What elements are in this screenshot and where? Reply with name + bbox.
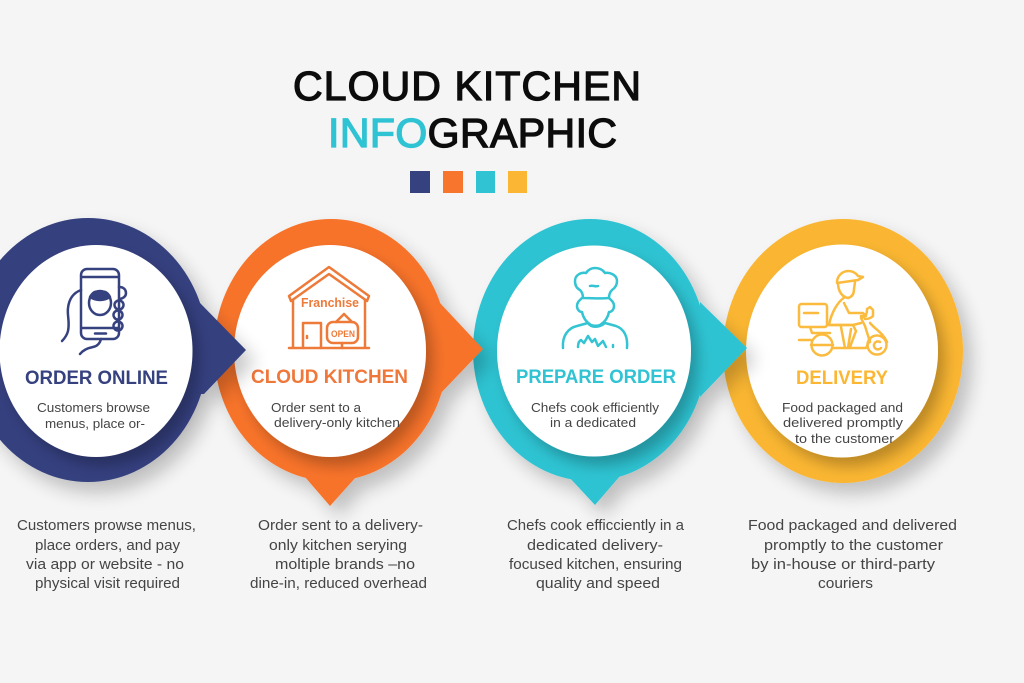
inner text: delivery: to the customer <box>795 431 895 446</box>
inner text: delivery: delivered promptly <box>783 415 904 430</box>
title: INFOGRAPHIC <box>328 110 617 156</box>
description: prepare order <box>507 518 684 592</box>
icon: delivery scooter <box>799 271 887 356</box>
white disc <box>497 246 691 456</box>
description: delivery: promptly to the customer <box>764 538 943 554</box>
description: cloud kitchen: Order sent to a delivery- <box>258 518 423 534</box>
description: prepare order: Chefs cook efficciently in a <box>507 518 684 534</box>
description: cloud kitchen: moltiple brands –no <box>275 557 415 573</box>
description: delivery: couriers <box>818 576 873 592</box>
description: cloud kitchen: dine-in, reduced overhead <box>250 576 427 592</box>
navy ring with pointer <box>0 218 246 482</box>
white disc <box>746 244 938 458</box>
panel: prepare order <box>473 219 747 505</box>
inner text: prepare order: in a dedicated <box>550 415 636 430</box>
title <box>293 63 641 156</box>
inner text: order online <box>37 400 150 431</box>
description: cloud kitchen <box>250 518 427 592</box>
inner text: delivery <box>782 400 904 446</box>
inner text: cloud kitchen: delivery-only kitchen <box>274 415 400 430</box>
icon: hand holding phone <box>62 269 126 354</box>
inner text: order online: menus, place or- <box>45 416 145 431</box>
orange ring with pointers <box>214 219 483 506</box>
yellow ring <box>723 219 963 483</box>
inner text: prepare order: Chefs cook efficiently <box>531 400 660 415</box>
title: CLOUD KITCHEN <box>293 63 641 109</box>
description: order online: Customers prowse menus, <box>17 518 196 534</box>
description: order online: place orders, and pay <box>35 538 181 554</box>
white disc <box>0 245 192 457</box>
description: delivery: Food packaged and delivered <box>748 518 957 534</box>
panel: order online <box>0 218 246 482</box>
description: cloud kitchen: only kitchen serying <box>269 538 407 554</box>
description: order online: via app or website - no <box>26 557 184 573</box>
teal ring with pointers <box>473 219 747 505</box>
inner text: cloud kitchen: Order sent to a <box>271 400 362 415</box>
inner text: prepare order <box>531 400 660 430</box>
icon: chef <box>563 268 627 348</box>
heading: delivery: DELIVERY <box>796 367 888 389</box>
description: prepare order: dedicated delivery- <box>527 538 663 554</box>
description: order online <box>17 518 196 592</box>
panel: cloud kitchen <box>214 219 483 506</box>
inner text: delivery: Food packaged and <box>782 400 903 415</box>
description: order online: physical visit required <box>35 576 180 592</box>
icon: franchise storefront <box>289 267 369 348</box>
description: prepare order: quality and speed <box>536 576 660 592</box>
icon: franchise storefront: Franchise <box>301 295 359 310</box>
description: delivery <box>748 518 957 592</box>
colour legend squares <box>410 171 527 193</box>
inner text: order online: Customers browse <box>37 400 150 415</box>
heading: order online: ORDER ONLINE <box>25 367 168 389</box>
heading: cloud kitchen: CLOUD KITCHEN <box>251 366 408 388</box>
white disc <box>234 245 426 457</box>
inner text: cloud kitchen <box>271 400 400 430</box>
panel: delivery <box>723 219 963 483</box>
description: prepare order: focused kitchen, ensuring <box>509 557 682 573</box>
description: delivery: by in-house or third-party <box>751 557 936 573</box>
icon: franchise storefront: OPEN <box>331 329 355 340</box>
heading: prepare order: PREPARE ORDER <box>516 366 676 388</box>
